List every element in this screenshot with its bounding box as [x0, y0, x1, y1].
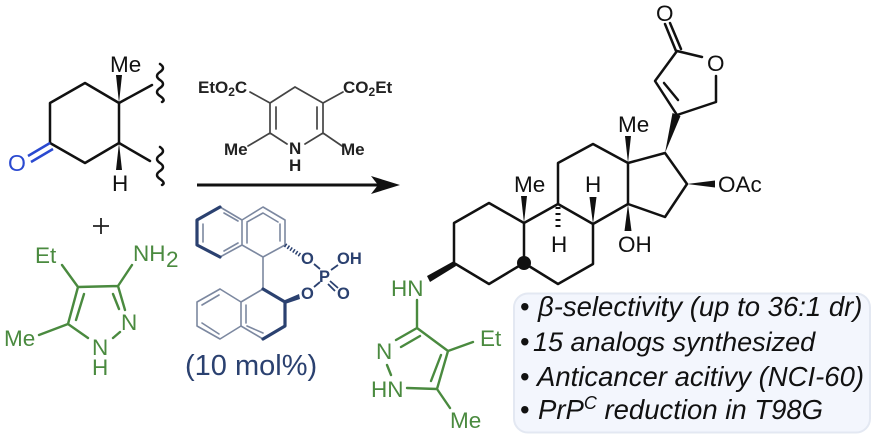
butenolide ring [655, 1, 725, 115]
aminopyrazole reagent: Et [35, 243, 57, 268]
chiral phosphoric acid catalyst: OH [337, 250, 362, 268]
result: PrP reduction: PrP [538, 394, 584, 425]
result: PrP reduction: C [584, 393, 598, 413]
steroid product: OH [618, 232, 652, 257]
pyrazole substituent on product: Et [480, 326, 502, 351]
steroid product: Me [618, 112, 649, 137]
butenolide ring: O [656, 1, 674, 26]
result: anticancer: • [520, 361, 530, 392]
chiral phosphoric acid catalyst: O [301, 285, 314, 303]
butenolide ring: O [707, 51, 725, 76]
aminopyrazole reagent [4, 241, 179, 380]
aminopyrazole reagent: NH [133, 241, 166, 266]
panel: key results [514, 291, 870, 432]
steroid product: Me [514, 172, 545, 197]
steroid product: H [551, 232, 567, 257]
Hantzsch ester reductant: Et [375, 78, 393, 97]
Hantzsch ester reductant: Me [224, 140, 248, 159]
result: selectivity: • [520, 291, 530, 322]
aminopyrazole reagent: N [121, 310, 137, 335]
chiral phosphoric acid catalyst [197, 207, 362, 339]
plus sign [93, 218, 109, 234]
chiral phosphoric acid catalyst: P [319, 268, 330, 286]
Hantzsch ester reductant: N [289, 139, 301, 158]
result: PrP reduction: • [520, 394, 530, 425]
Hantzsch ester reductant: C [235, 78, 247, 97]
result: analogs: 15 analogs synthesized [533, 327, 816, 357]
steroid product: H [585, 172, 601, 197]
aminopyrazole reagent: Me [4, 326, 35, 351]
chiral phosphoric acid catalyst: O [337, 285, 350, 303]
ketone steroid fragment: Me [110, 52, 141, 77]
result: selectivity: β-selectivity (up to 36:1 dr) [537, 291, 862, 322]
reaction arrow [197, 176, 400, 194]
Hantzsch ester reductant: Me [341, 140, 365, 159]
result: PrP reduction: reduction in T98G [597, 394, 823, 425]
ketone steroid fragment [8, 52, 164, 196]
ketone steroid fragment: H [112, 171, 128, 196]
catalyst loading: (10 mol%) [185, 350, 317, 382]
pyrazole substituent on product: HN [371, 377, 404, 402]
chiral phosphoric acid catalyst: O [301, 250, 314, 268]
Hantzsch ester reductant: H [289, 156, 301, 175]
pyrazole substituent on product: Me [450, 408, 481, 433]
pyrazole substituent on product: N [376, 339, 392, 364]
Hantzsch ester reductant: CO [343, 78, 368, 97]
pyrazole substituent on product: HN [391, 276, 424, 301]
aminopyrazole reagent: H [92, 355, 108, 380]
steroid product: OAc [718, 172, 762, 197]
Hantzsch ester reductant: 2 [368, 85, 376, 99]
aminopyrazole reagent: N [92, 335, 108, 360]
result: anticancer: Anticancer acitivy (NCI-60) [535, 361, 864, 392]
ketone steroid fragment: O [8, 150, 26, 176]
Hantzsch ester reductant: EtO [198, 78, 228, 97]
Hantzsch ester reductant: 2 [228, 85, 235, 99]
steroid product [427, 1, 762, 284]
result: analogs: • [520, 326, 530, 357]
pyrazole substituent on product [371, 276, 502, 433]
Hantzsch ester reductant [198, 78, 393, 175]
aminopyrazole reagent: 2 [166, 247, 179, 272]
